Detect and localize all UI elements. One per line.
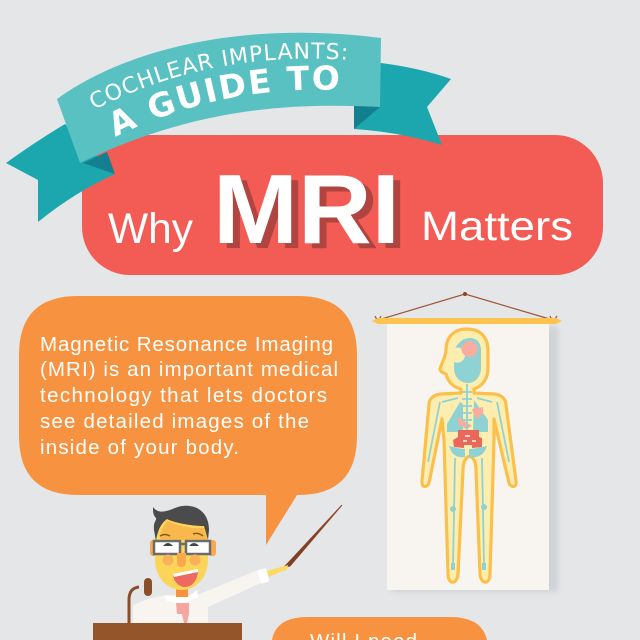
bubble text: inside of your body.	[40, 436, 239, 459]
brain	[462, 341, 478, 357]
ears	[150, 540, 158, 556]
pointer stick	[284, 505, 342, 567]
hanging string	[375, 294, 557, 322]
rod pin	[463, 292, 467, 296]
ribbon right fold	[354, 105, 380, 129]
bubble text: (MRI) is an important medical	[40, 358, 338, 381]
ribbon left tail	[6, 124, 115, 222]
neck	[176, 588, 188, 598]
text: Matters: Matters	[421, 203, 573, 249]
forehead	[160, 521, 207, 540]
knee joints	[450, 504, 487, 570]
bubble text: Magnetic Resonance Imaging	[40, 333, 333, 356]
skeleton spine and limbs	[428, 384, 509, 565]
ribbon main band	[57, 33, 381, 163]
heart	[472, 407, 483, 419]
face	[155, 516, 208, 590]
mouth	[173, 570, 198, 587]
poster sheet	[387, 323, 549, 590]
poster: human body chart	[372, 292, 562, 592]
hair	[153, 506, 209, 541]
heading: MRI: MRI	[213, 154, 400, 264]
eyes	[163, 543, 199, 546]
cuff	[257, 568, 270, 584]
title panel: Why MRI Matters	[82, 135, 603, 275]
text: Why: Why	[108, 205, 193, 253]
eyebrows	[160, 533, 203, 536]
pelvis	[449, 446, 487, 457]
ribbon left fold	[83, 152, 115, 174]
body silhouette	[422, 329, 516, 582]
tie	[176, 603, 189, 623]
cheeks	[162, 554, 174, 566]
bubble text: see detailed images of the	[40, 410, 309, 433]
intestine flecks	[463, 436, 476, 441]
microphone	[129, 587, 139, 623]
liver	[458, 417, 472, 429]
doctor character	[93, 505, 342, 640]
glasses	[154, 541, 210, 554]
collar	[165, 590, 198, 603]
intestines	[453, 430, 482, 448]
ribbon text line 1: COCHLEAR IMPLANTS:	[90, 42, 346, 108]
torso and arm	[133, 570, 263, 623]
ribbon banner	[6, 32, 451, 222]
lectern	[93, 623, 242, 640]
second speech bubble (cut off)	[272, 617, 487, 640]
nose	[177, 553, 186, 567]
lungs	[447, 400, 488, 432]
poster rod	[372, 318, 562, 324]
speech bubble	[19, 296, 357, 545]
poster shadow	[392, 326, 558, 592]
heading shadow: MRI: MRI	[220, 159, 407, 269]
ribbon text line 2: A GUIDE TO	[113, 65, 338, 137]
hand	[267, 565, 288, 577]
head scan area	[454, 338, 481, 383]
bubble text: technology that lets doctors	[40, 384, 327, 407]
ribbon right tail	[354, 63, 451, 145]
